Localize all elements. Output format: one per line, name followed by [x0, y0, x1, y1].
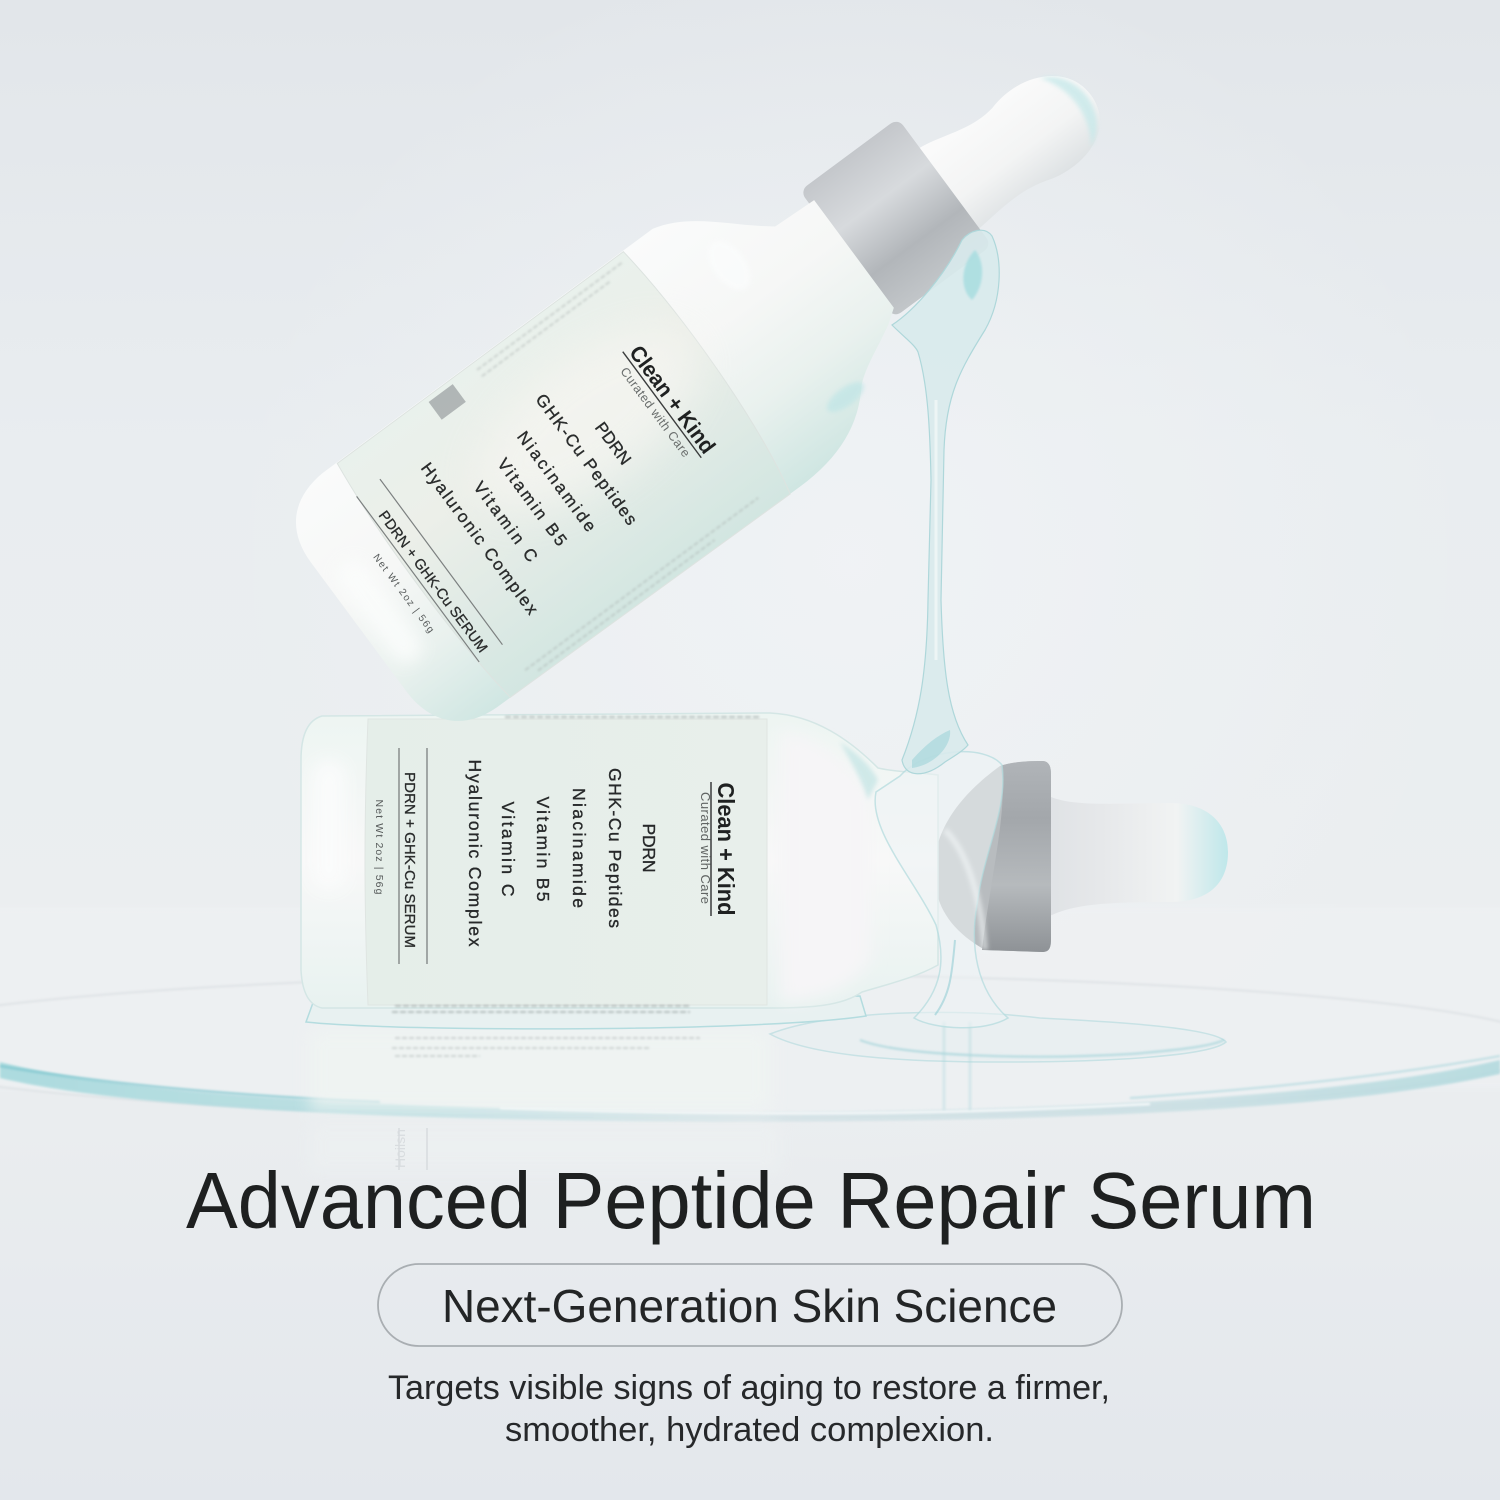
secondary puddle: [770, 1012, 1226, 1110]
dropper bulb: [909, 47, 1119, 241]
liquid pool: [0, 974, 1500, 1122]
ingredient list: Vitamin B5: [493, 455, 571, 550]
footer rules: [399, 748, 427, 964]
ingredient list: [465, 760, 659, 947]
bottle base ring: [306, 996, 866, 1029]
liquid stream: [892, 230, 999, 774]
description: Targets visible signs of aging to restore a firmer,: [388, 1369, 1110, 1407]
net weight: Net Wt 2oz | 56g: [371, 552, 436, 635]
ingredient list: Vitamin B5: [533, 796, 553, 902]
pill outline: [378, 1264, 1122, 1346]
ingredient list: GHK-Cu Peptides: [532, 390, 641, 529]
title: Advanced Peptide Repair Serum: [186, 1156, 1316, 1245]
ingredient list: Niacinamide: [569, 788, 589, 908]
collar shoulder: [934, 761, 1051, 952]
subtitle: Next-Generation Skin Science: [442, 1280, 1057, 1332]
bottle reflection: Hoilsn: [392, 1129, 408, 1168]
brand name: Clean + Kind: [624, 341, 721, 458]
product name: PDRN + GHK-Cu SERUM: [375, 508, 490, 656]
bottle body: [301, 713, 938, 1008]
ingredient list: PDRN: [639, 824, 659, 872]
ingredient list: Hyaluronic Complex: [417, 459, 542, 619]
ingredient list: Vitamin C: [498, 802, 518, 896]
subtitle pill: [378, 1264, 1122, 1346]
silver collar: [800, 118, 992, 318]
background glow: [0, 0, 1500, 1200]
shoulder highlight: [700, 233, 759, 297]
product name: PDRN + GHK-Cu SERUM: [401, 772, 418, 948]
left highlight: [312, 760, 346, 890]
label: [331, 248, 803, 704]
end highlight: [331, 554, 428, 669]
QR code: [429, 384, 466, 420]
brand name: Clean + Kind: [713, 782, 739, 916]
bottle reflection: [310, 1030, 780, 1172]
ingredient list: Niacinamide: [513, 428, 600, 535]
description: smoother, hydrated complexion.: [505, 1411, 994, 1449]
body shading: [780, 730, 870, 1002]
ingredient list: GHK-Cu Peptides: [605, 768, 625, 928]
bottom bottle: [301, 713, 1228, 1029]
label glow: [448, 294, 729, 545]
bottle body: [272, 141, 946, 747]
tagline: Curated with Care: [698, 792, 713, 904]
label: [365, 719, 767, 1005]
ingredient list: Vitamin C: [470, 478, 541, 566]
description: [388, 1369, 1110, 1449]
small print: [392, 717, 760, 1012]
tagline: Curated with Care: [617, 365, 693, 460]
bottom gel coating: [875, 752, 1008, 1028]
brand rule: [623, 352, 701, 458]
ingredient list: Hyaluronic Complex: [465, 760, 485, 947]
ingredient list: [417, 361, 674, 619]
silver collar band: [982, 761, 1051, 952]
shoulder tint: [840, 742, 878, 800]
net weight: Net Wt 2oz | 56g: [373, 800, 385, 895]
brand rule: [710, 782, 712, 916]
small print: [364, 263, 787, 677]
bulb tint: [1040, 62, 1113, 147]
dropper bulb: [1046, 795, 1228, 918]
top bottle: [272, 0, 1175, 747]
table surface: [0, 908, 1500, 1088]
footer rules: [357, 479, 502, 662]
ingredient list: PDRN: [591, 419, 635, 468]
